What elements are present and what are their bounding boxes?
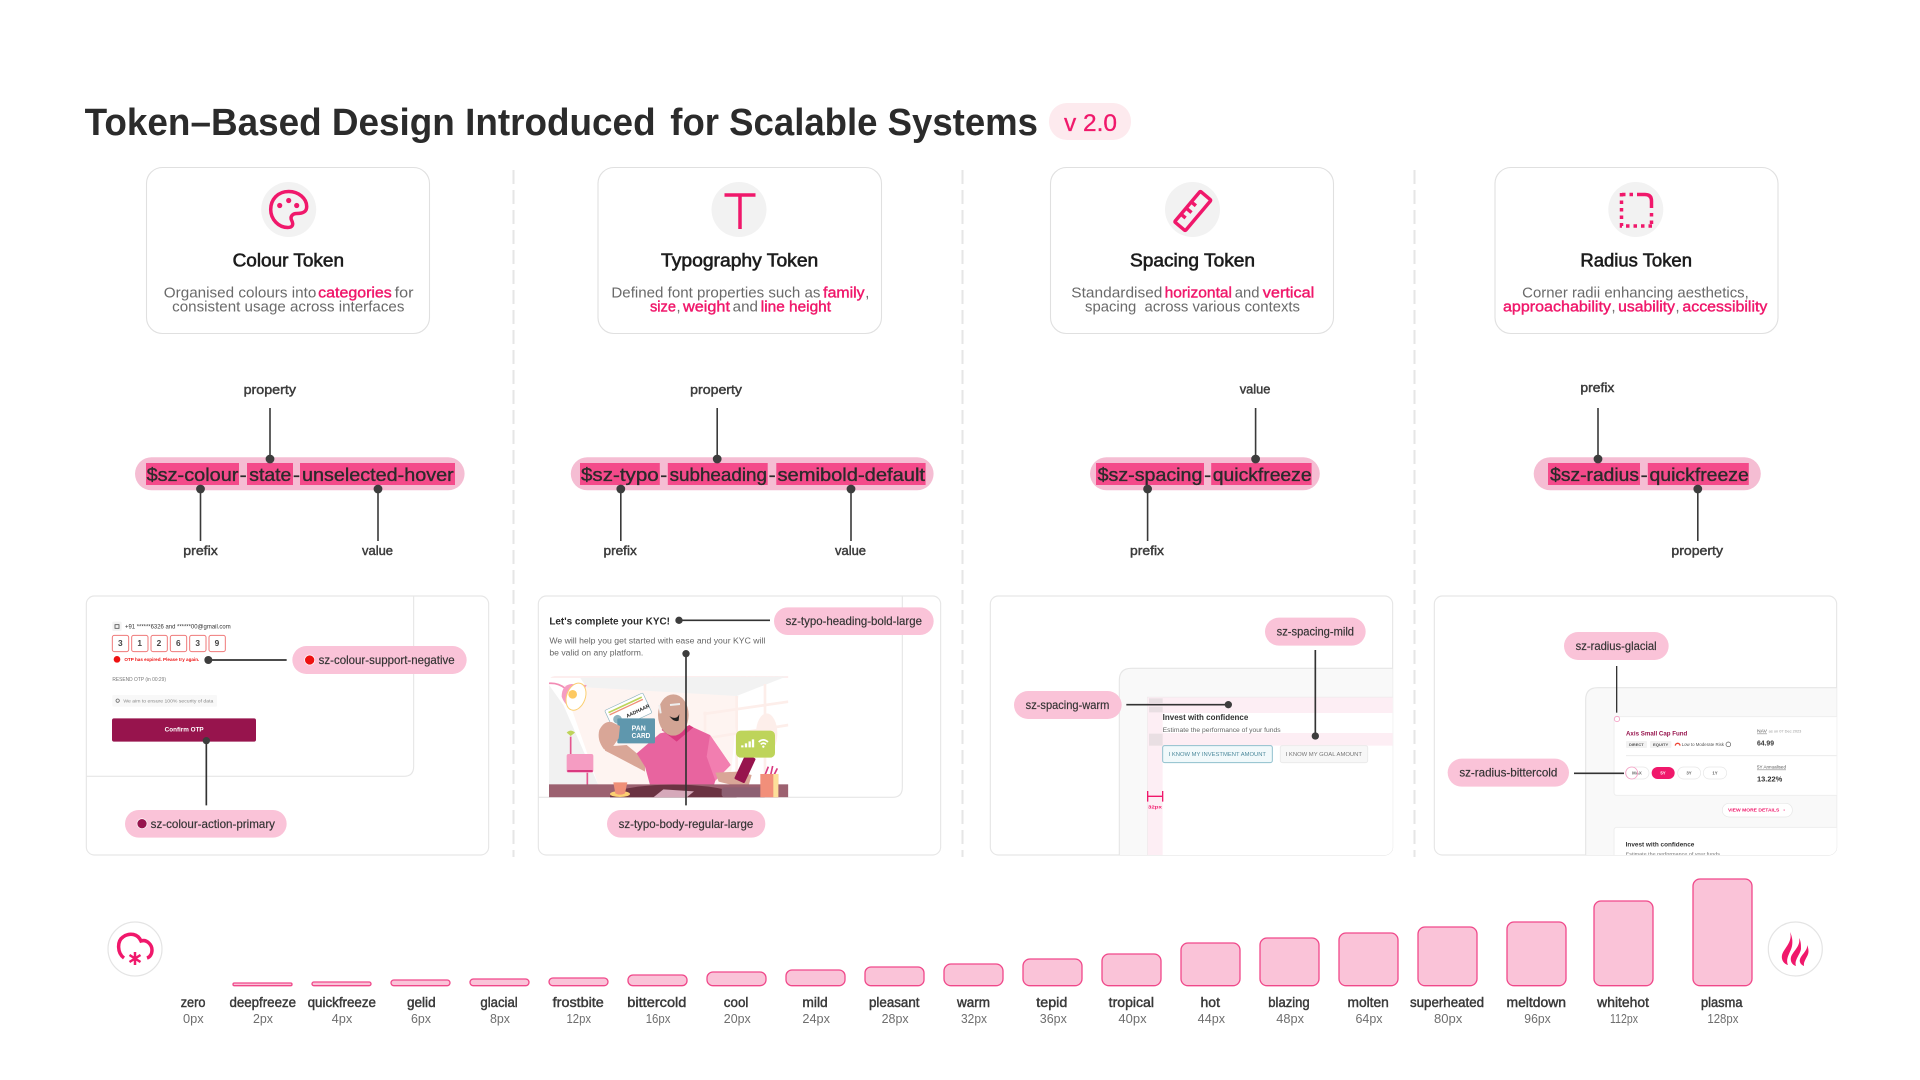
card description: weight	[682, 300, 730, 316]
warm	[944, 964, 1003, 1026]
icon: ruler	[1165, 182, 1220, 237]
connector: support negative	[204, 656, 287, 664]
quickfreeze: quickfreeze	[308, 995, 376, 1010]
token text: subheading	[670, 465, 767, 485]
card description: vertical	[1263, 286, 1314, 302]
fund card: EQUITY	[1653, 742, 1669, 747]
deepfreeze: deepfreeze	[230, 995, 296, 1010]
whitehot: 112px	[1610, 1012, 1639, 1026]
warm: warm	[956, 995, 990, 1010]
aadhaar card	[604, 692, 652, 724]
signal bubble	[736, 731, 775, 758]
desk	[549, 784, 788, 797]
label: property: property	[1671, 543, 1724, 558]
hot: hot	[1200, 995, 1220, 1010]
form heading: Invest with confidence	[1163, 713, 1249, 722]
deepfreeze	[230, 983, 296, 1026]
deepfreeze: 2px	[253, 1012, 274, 1026]
button: goal amount: I KNOW MY GOAL AMOUNT	[1286, 752, 1363, 758]
card description: approachability	[1503, 300, 1612, 316]
meltdown	[1506, 922, 1566, 1026]
meltdown: 96px	[1524, 1012, 1551, 1026]
label: property: property	[244, 382, 297, 397]
connector: glacial	[1614, 666, 1620, 722]
cool: cool	[724, 995, 748, 1010]
title: Token–Based Design Introduced	[85, 102, 656, 144]
meltdown: meltdown	[1506, 995, 1566, 1010]
OTP digit boxes	[112, 635, 225, 652]
gelid: 6px	[411, 1012, 432, 1026]
token pill: body: sz-typo-body-regular-large	[619, 818, 753, 831]
card heading: Typography Token	[661, 250, 818, 271]
card description: ,	[865, 286, 869, 302]
confirm OTP button: Confirm OTP	[165, 727, 204, 734]
period pills: 1Y	[1712, 771, 1718, 776]
card description: spacing across various contexts	[1085, 300, 1300, 316]
fund card: NAV	[1757, 729, 1767, 734]
lamp	[549, 682, 587, 711]
token pill: action primary: sz-colour-action-primary	[151, 818, 275, 831]
token text	[581, 465, 925, 485]
panel: typography token card	[598, 168, 882, 334]
period pills: 5Y	[1660, 771, 1666, 776]
quickfreeze	[308, 982, 376, 1026]
aadhaar card: AADHAAR	[625, 703, 651, 720]
fund card: 64.99	[1757, 741, 1774, 748]
plasma: plasma	[1701, 995, 1743, 1010]
fund card: as on 07 Dec 2023	[1769, 730, 1801, 734]
fund card: Axis Small Cap Fund	[1626, 731, 1688, 737]
measure: 32px	[1148, 791, 1163, 811]
resend text: RESEND OTP (in 00:29)	[112, 677, 166, 683]
token text: quickfreeze	[1650, 465, 1749, 485]
arm and hand	[605, 745, 645, 772]
OTP digit boxes: 2	[157, 638, 162, 648]
molten	[1339, 933, 1398, 1026]
card description: accessibility	[1682, 300, 1768, 316]
icon: rounded corner	[1608, 182, 1663, 237]
label: prefix: prefix	[604, 543, 637, 558]
button: goal amount	[1280, 746, 1368, 763]
whitehot: whitehot	[1596, 995, 1649, 1010]
button: investment amount	[1163, 746, 1272, 763]
panel: radius token card	[1495, 168, 1778, 334]
card description: ,	[1676, 300, 1680, 316]
frostbite: 12px	[566, 1012, 592, 1026]
quickfreeze: 4px	[332, 1012, 353, 1026]
card description: horizontal	[1165, 286, 1232, 302]
card description: Corner radii enhancing aesthetics,	[1522, 286, 1749, 302]
version badge: v 2.0	[1064, 110, 1117, 137]
label: value: value	[1240, 381, 1270, 396]
superheated: superheated	[1410, 995, 1484, 1010]
card heading: Radius Token	[1580, 250, 1692, 271]
token pill: glacial	[1564, 632, 1669, 660]
title: for Scalable Systems	[670, 102, 1038, 144]
plasma	[1693, 879, 1752, 1026]
whitehot	[1594, 901, 1653, 1026]
mild: 24px	[802, 1012, 831, 1026]
label: prefix: prefix	[1130, 543, 1165, 558]
pan card: CARD	[632, 733, 650, 740]
card description	[1503, 286, 1768, 316]
KYC body text: We will help you get started with ease and your KYC will	[549, 636, 766, 645]
token text	[147, 465, 454, 485]
bittercold: 16px	[646, 1012, 671, 1026]
blazing: 48px	[1276, 1012, 1305, 1026]
token text: state	[249, 465, 291, 485]
measure: 32px: 32px	[1148, 805, 1162, 811]
security note: We aim to ensure 100% security of data	[123, 699, 214, 705]
version badge	[1049, 103, 1131, 140]
bittercold: bittercold	[627, 995, 686, 1010]
blazing: blazing	[1268, 995, 1310, 1010]
card heading: Colour Token	[233, 250, 344, 271]
mild	[786, 970, 845, 1026]
zero: 0px	[183, 1012, 204, 1026]
frostbite: frostbite	[553, 995, 604, 1010]
view more button: VIEW MORE DETAILS	[1728, 808, 1779, 813]
tepid: tepid	[1036, 995, 1067, 1010]
connector: action primary	[203, 737, 210, 805]
label: property: property	[690, 382, 743, 397]
pleasant: pleasant	[869, 995, 920, 1010]
cool	[707, 972, 766, 1026]
contact line	[112, 622, 231, 631]
warm: 32px	[961, 1012, 988, 1026]
pleasant	[865, 967, 924, 1026]
KYC body text	[549, 636, 766, 658]
cup	[610, 782, 630, 797]
card description: Standardised	[1071, 286, 1162, 302]
panel: colour example	[86, 596, 489, 855]
view more button: ›	[1783, 808, 1785, 813]
pleasant: 28px	[882, 1012, 909, 1026]
period pills: 3Y	[1686, 771, 1692, 776]
token anatomy: colour	[135, 382, 465, 558]
zero	[181, 995, 205, 1026]
pen holder	[760, 766, 778, 797]
card description: and	[1235, 286, 1260, 302]
token pill: support negative	[292, 646, 467, 674]
fund card	[1614, 717, 1847, 795]
token text: quickfreeze	[1213, 465, 1312, 485]
card description: size	[650, 300, 676, 316]
head	[658, 694, 689, 736]
OTP digit boxes: 3	[195, 638, 200, 648]
panel: spacing token card	[1050, 168, 1334, 334]
pan card	[617, 718, 655, 743]
token pill: support negative: sz-colour-support-negative	[319, 654, 455, 667]
token text: -	[769, 465, 776, 485]
icon: hot flames	[1768, 922, 1822, 976]
KYC body text: be valid on any platform.	[549, 649, 643, 658]
glacial: 8px	[490, 1012, 511, 1026]
card description: line height	[761, 300, 831, 316]
token text: $sz-spacing	[1098, 465, 1202, 485]
plasma: 128px	[1707, 1012, 1739, 1026]
card description: categories	[318, 286, 392, 302]
glacial	[470, 979, 529, 1026]
card description: Organised colours into	[164, 286, 316, 302]
illustration: man holding ID cards	[549, 676, 788, 809]
card description: and	[733, 300, 758, 316]
token text	[1550, 465, 1749, 485]
OTP error message: OTP has expired. Please try again.	[124, 657, 200, 663]
blazing	[1260, 938, 1319, 1026]
token text: $sz-colour	[147, 465, 238, 485]
card heading: Spacing Token	[1130, 250, 1255, 271]
fund card: 5Y Annualised	[1757, 765, 1787, 770]
card description	[164, 286, 414, 316]
icon: palette	[261, 182, 316, 237]
token pill: mild: sz-spacing-mild	[1277, 626, 1354, 639]
token pill: bittercold	[1448, 759, 1569, 787]
panel: typography example	[538, 596, 941, 855]
frostbite	[549, 978, 608, 1026]
fund card: 13.22%	[1757, 774, 1783, 783]
tepid	[1023, 959, 1082, 1026]
label: value: value	[362, 543, 393, 558]
card description: for	[395, 286, 414, 302]
tropical	[1102, 954, 1161, 1026]
token text: $sz-typo	[581, 465, 659, 485]
card description: family	[823, 286, 865, 302]
superheated: 80px	[1434, 1012, 1463, 1026]
OTP digit boxes: 1	[137, 638, 142, 648]
title	[85, 102, 1038, 144]
hot	[1181, 943, 1240, 1026]
token text: -	[293, 465, 300, 485]
token pill: action primary	[125, 810, 287, 838]
tropical: 40px	[1118, 1012, 1147, 1026]
molten: 64px	[1356, 1012, 1383, 1026]
confirm OTP button	[112, 718, 256, 742]
label: prefix: prefix	[183, 543, 218, 558]
zero: zero	[181, 995, 205, 1010]
fund card: DIRECT	[1629, 742, 1644, 747]
form subheading: Estimate the performance of your funds	[1163, 727, 1281, 734]
notebook	[653, 789, 694, 797]
icon: letter T	[712, 182, 766, 237]
right arm	[716, 772, 752, 784]
token pill: heading: sz-typo-heading-bold-large	[786, 615, 922, 628]
card description	[1071, 286, 1314, 316]
card description: consistent usage across interfaces	[172, 300, 404, 316]
token anatomy: typography	[571, 382, 934, 558]
card description: Defined font properties such as	[611, 286, 820, 302]
second card: Estimate the performance of your funds	[1626, 851, 1721, 857]
hot: 44px	[1198, 1012, 1226, 1026]
token text: -	[240, 465, 247, 485]
shirt	[637, 727, 731, 785]
second card: Invest with confidence	[1626, 842, 1695, 849]
panel: radius example	[1434, 596, 1847, 867]
token pill: bittercold: sz-radius-bittercold	[1459, 767, 1557, 780]
token pill: body	[607, 810, 765, 838]
connector: bittercold	[1574, 767, 1638, 779]
card description: ,	[1612, 300, 1616, 316]
KYC heading: Let's complete your KYC!	[549, 617, 670, 628]
connector: mild	[1312, 650, 1319, 740]
molten: molten	[1348, 995, 1389, 1010]
connector: heading	[675, 617, 770, 624]
fund card: Low to Moderate Risk	[1682, 742, 1725, 747]
gelid: gelid	[407, 995, 436, 1010]
OTP digit boxes: 6	[176, 638, 181, 648]
spacing scale: bars and labels	[181, 879, 1752, 1026]
token text: semibold-default	[778, 465, 925, 485]
token pill: warm: sz-spacing-warm	[1026, 699, 1109, 712]
bittercold	[627, 975, 687, 1026]
token text	[1098, 465, 1312, 485]
token text: -	[1204, 465, 1211, 485]
gelid	[391, 980, 450, 1026]
card description: usability	[1618, 300, 1676, 316]
panel: colour token card	[146, 168, 430, 334]
view more button	[1722, 803, 1792, 817]
spacing overlays	[1148, 697, 1398, 857]
OTP digit boxes: 3	[118, 638, 123, 648]
second card	[1614, 827, 1836, 855]
card description	[611, 286, 869, 316]
token pill: warm	[1014, 691, 1122, 719]
tropical: tropical	[1109, 995, 1154, 1010]
period pills	[1626, 767, 1727, 779]
token anatomy: radius	[1534, 380, 1761, 558]
period pills: MAX	[1632, 771, 1642, 776]
token pill: mild	[1265, 618, 1366, 646]
cool: 20px	[724, 1012, 751, 1026]
router	[567, 731, 593, 785]
card description: ,	[676, 300, 681, 316]
connector: body	[682, 650, 690, 805]
pan card: PAN	[632, 726, 646, 733]
OTP digit boxes: 9	[215, 638, 220, 648]
icon: cold cloud	[108, 922, 162, 976]
label: value: value	[835, 543, 866, 558]
connector: warm	[1126, 701, 1232, 708]
token text: $sz-radius	[1550, 465, 1639, 485]
token text: -	[1641, 465, 1648, 485]
token anatomy: spacing	[1090, 381, 1320, 558]
security note	[112, 695, 217, 707]
token text: -	[660, 465, 667, 485]
mild: mild	[802, 995, 828, 1010]
tepid: 36px	[1040, 1012, 1068, 1026]
token pill: heading	[774, 607, 934, 635]
phone	[734, 758, 756, 783]
superheated	[1410, 927, 1484, 1026]
glacial: glacial	[480, 995, 518, 1010]
button: investment amount: I KNOW MY INVESTMENT AMOUNT	[1169, 752, 1267, 758]
token pill: glacial: sz-radius-glacial	[1576, 640, 1657, 653]
token text: unselected-hover	[302, 465, 454, 485]
contact line: +91 ******6326 and ******00@gmail.com	[125, 624, 231, 631]
panel: spacing example	[990, 596, 1398, 857]
label: prefix: prefix	[1580, 380, 1615, 395]
